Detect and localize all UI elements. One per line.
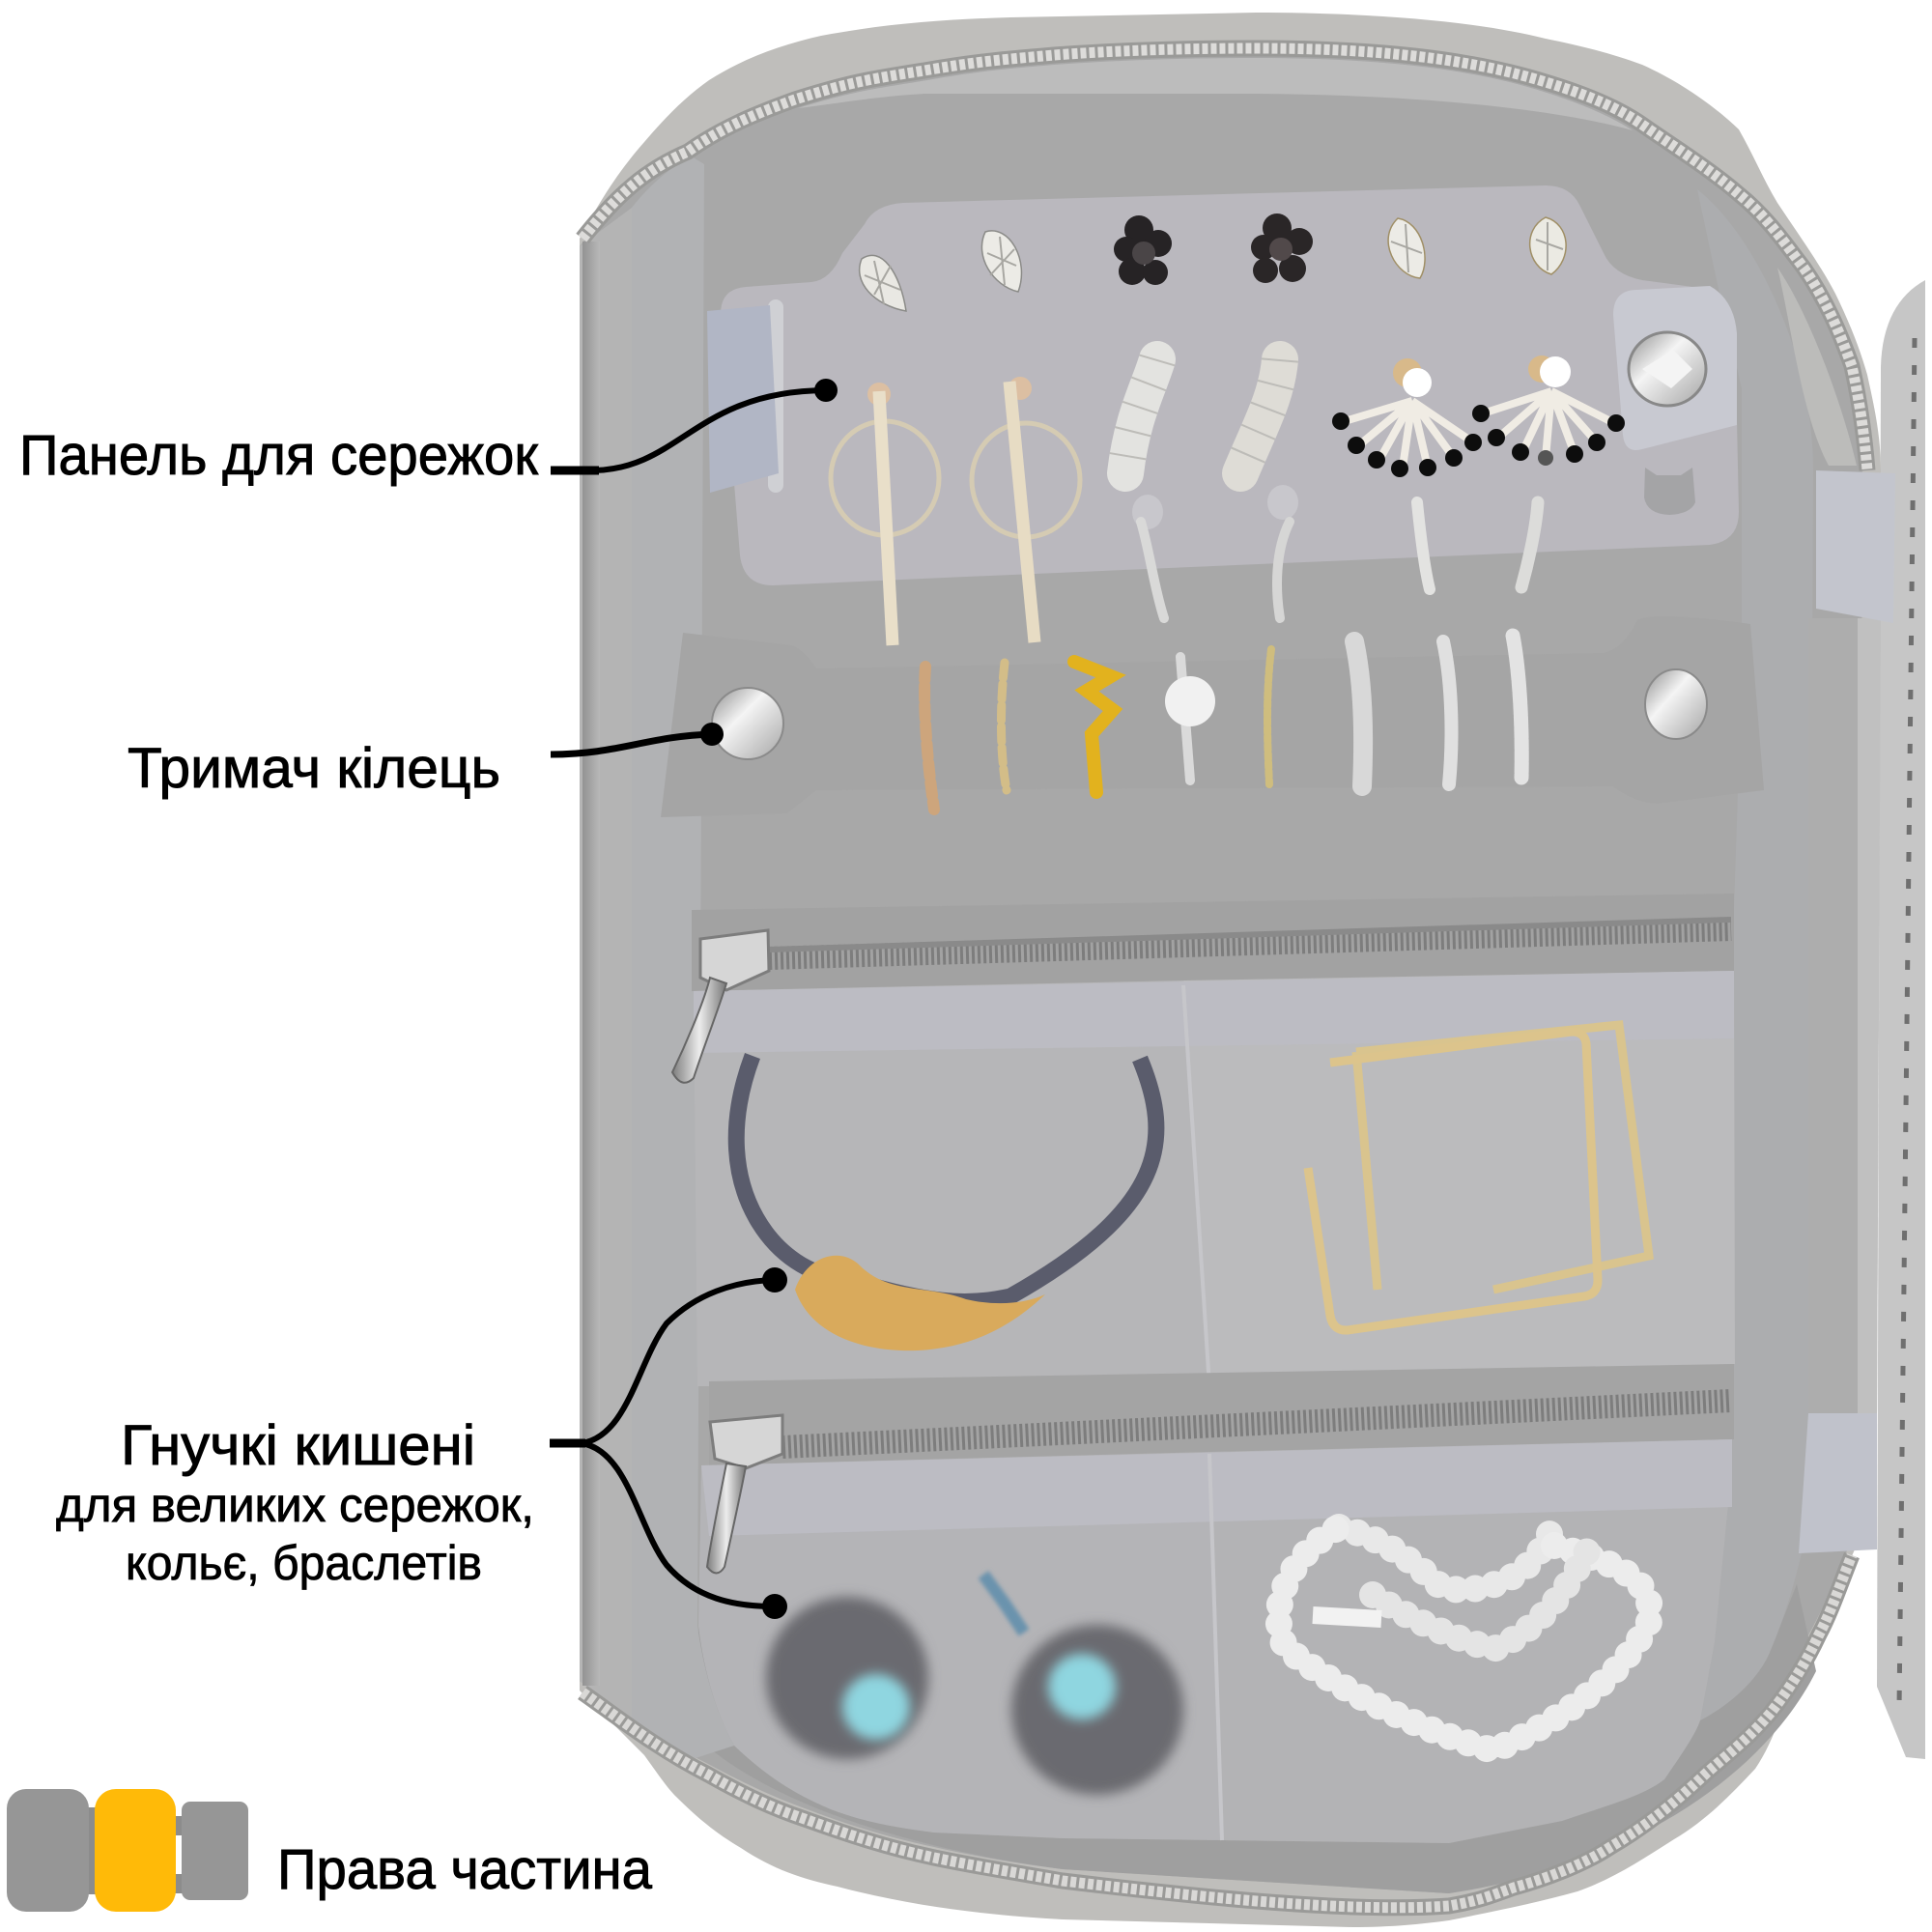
hoop bar earrings [831, 377, 1080, 645]
left outer wall [580, 208, 632, 1724]
leaf stud [1530, 217, 1566, 274]
holder strip [661, 616, 1764, 817]
right strap bottom [1799, 1413, 1877, 1553]
snap tab [1613, 286, 1737, 450]
cat cutout [1644, 468, 1695, 515]
turquoise right [1048, 1654, 1116, 1719]
icon: organizer position [7, 1789, 248, 1912]
pocket right [1183, 971, 1735, 1386]
ring holder [661, 616, 1764, 817]
square hoop back [1356, 1025, 1649, 1290]
right edge light band [1858, 618, 1881, 1416]
pads [867, 383, 891, 406]
label: pockets detail one: для великих сережок, [56, 1478, 534, 1532]
right edge band [1808, 618, 1860, 1416]
upper pockets [694, 971, 1735, 1386]
rings [924, 636, 1521, 810]
bag photo [580, 13, 1925, 1927]
leaf stud [981, 231, 1021, 292]
hoop [831, 421, 939, 535]
hook [983, 1575, 1024, 1633]
hoop [972, 423, 1080, 537]
callout: flexible pockets [550, 1267, 787, 1619]
fan left [1332, 358, 1482, 477]
left edge shading [582, 242, 600, 1686]
stud earrings row [860, 213, 1566, 311]
pocket left [698, 1452, 1222, 1840]
left slot [768, 299, 783, 493]
right felt wall [1697, 189, 1813, 1720]
feather [795, 1256, 1045, 1350]
label: earring panel: Панель для сережок [19, 424, 539, 487]
fan right [1472, 355, 1625, 466]
rivet left [712, 688, 783, 759]
leaf stud [1388, 218, 1425, 278]
pocket divider [1209, 1454, 1222, 1840]
left strap [707, 305, 779, 493]
fan earrings [1332, 355, 1625, 477]
crystal bracelet [1279, 1520, 1650, 1750]
top strip [694, 971, 1734, 1053]
flower stud [1251, 213, 1313, 283]
lower lining darker [698, 1584, 1816, 1893]
pocket divider [1183, 985, 1209, 1386]
square hoop front [1308, 1032, 1598, 1330]
turquoise left [842, 1674, 910, 1740]
zipper teeth [769, 929, 1731, 958]
label: right part: Права частина [277, 1838, 653, 1901]
callout: ring holder [551, 723, 724, 754]
label: pockets detail two: кольє, браслетів [126, 1536, 482, 1590]
earring panel [707, 185, 1739, 585]
drop earring left [766, 1597, 928, 1759]
zip band two [709, 1364, 1734, 1465]
top strip [701, 1439, 1732, 1536]
zipper pull bottom [707, 1415, 782, 1573]
right flap [1877, 280, 1925, 1759]
zip band one [692, 894, 1734, 991]
drop earring right [1011, 1625, 1183, 1795]
lower pockets [698, 1439, 1732, 1843]
pocket left [694, 980, 1209, 1386]
top zipper [582, 48, 1867, 470]
rivet right [1645, 669, 1707, 739]
bracelet [736, 1056, 1156, 1301]
flap stitching [1899, 338, 1915, 1710]
panel body [721, 185, 1739, 585]
zipper pull top [672, 930, 769, 1083]
lining [580, 54, 1862, 1893]
leaf stud [860, 255, 906, 311]
left felt wall [632, 156, 734, 1758]
bar [1009, 382, 1035, 642]
bar [879, 391, 893, 645]
pocket right [1209, 1439, 1732, 1843]
callout: earring panel [551, 379, 838, 470]
label: flexible pockets: Гнучкі кишені [121, 1414, 475, 1477]
right lip [1777, 268, 1857, 466]
label: ring holder: Тримач кілець [128, 737, 500, 800]
flower stud [1114, 215, 1172, 285]
leather shell [580, 13, 1881, 1927]
right strap top [1816, 470, 1895, 623]
small silver hoops [1132, 485, 1538, 618]
bottom zipper [582, 1555, 1852, 1908]
crawler earrings [1125, 359, 1280, 473]
snap rivet [1629, 332, 1706, 406]
top light band [798, 58, 1633, 130]
